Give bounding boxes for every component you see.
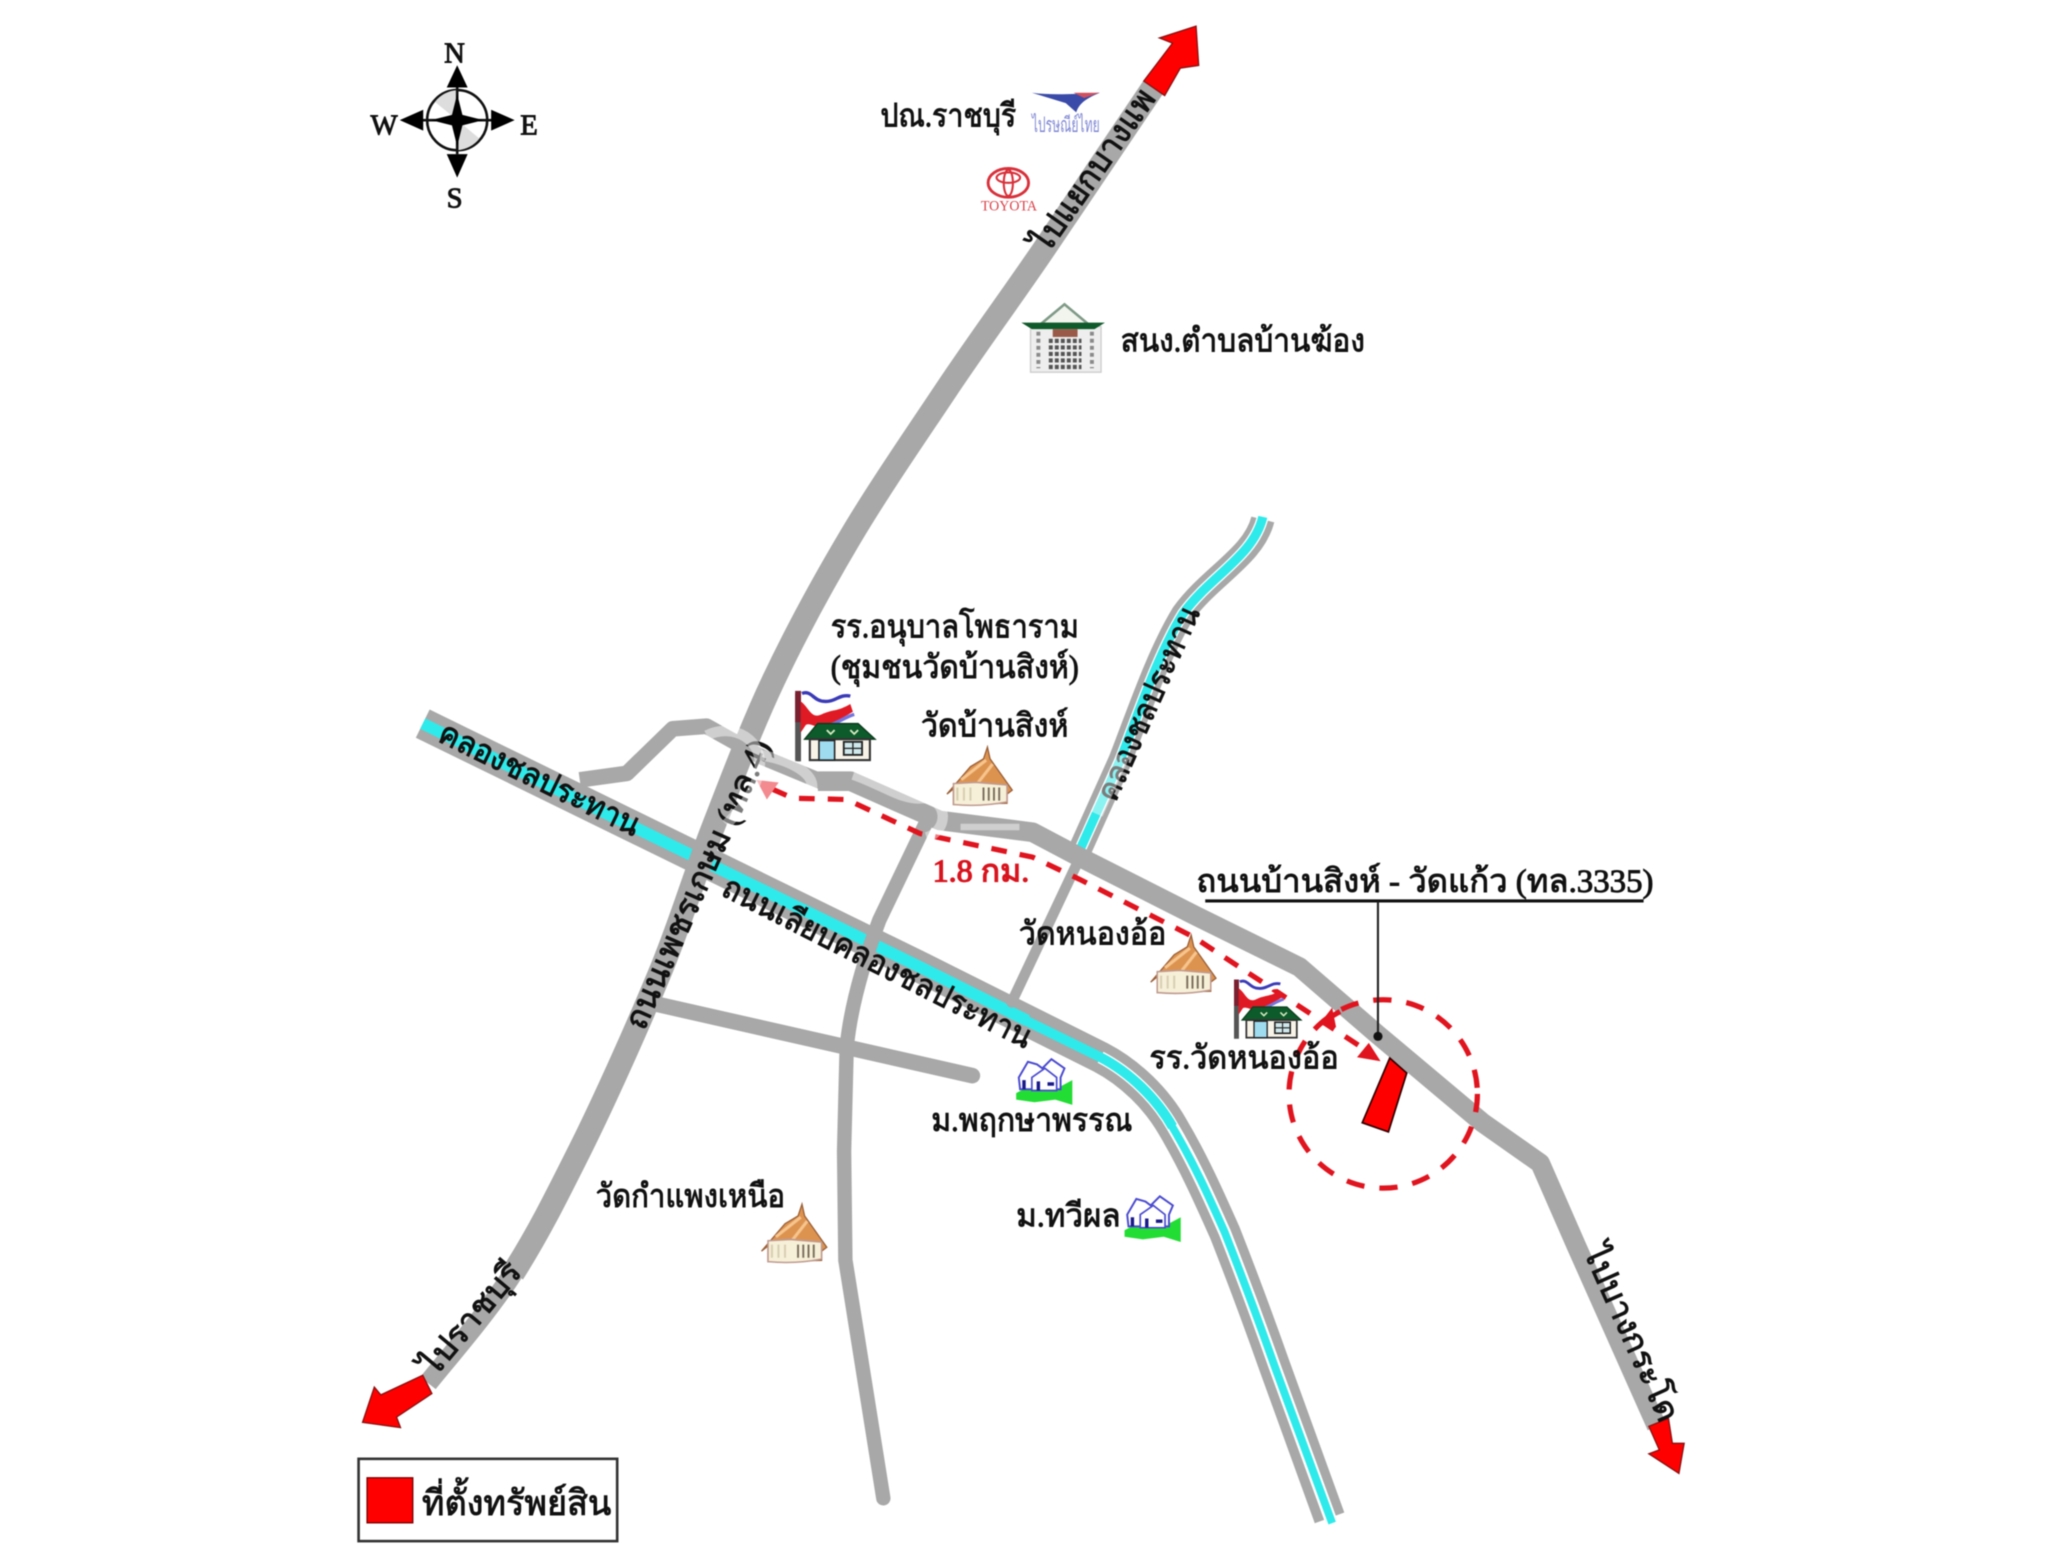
label: kindergarten school: รร.อนุบาลโพธาราม <box>831 607 1079 646</box>
callout leader line <box>1205 901 1644 1041</box>
label: Phruksa Phan housing: ม.พฤกษาพรรณ <box>931 1103 1132 1139</box>
canal: north branch <box>1080 517 1263 851</box>
legend: ที่ตั้งทรัพย์สิน <box>422 1477 611 1523</box>
icon: Wat Ban Sing temple <box>947 747 1012 805</box>
label: kindergarten school: (ชุมชนวัดบ้านสิงห์) <box>831 649 1079 687</box>
road label: Phetkasem: ถนนเพชรเกษม (ทล.4) <box>618 734 779 1035</box>
canal label: north: คลองชลประทาน <box>1090 601 1207 806</box>
icon: Thawi Phon housing <box>1125 1196 1181 1242</box>
icon: post logo: ไปรษณีย์ไทย <box>1031 113 1100 137</box>
icon: Toyota logo: TOYOTA <box>981 198 1038 214</box>
route: 1.8 km dashed line <box>756 780 1381 1061</box>
compass: N <box>444 38 465 70</box>
icon: post logo <box>1031 93 1100 137</box>
label: distance: 1.8 กม. <box>933 854 1029 889</box>
label: Wat Nong O: วัดหนองอ้อ <box>1019 916 1166 952</box>
icon: Wat Nong O temple <box>1151 935 1216 993</box>
icon: subdistrict office <box>1021 304 1105 372</box>
road label: to Bang Kradi: ไปบางกระโด <box>1574 1236 1687 1427</box>
label: Wat Nong O school: รร.วัดหนองอ้อ <box>1149 1040 1339 1076</box>
label: Ratchaburi post office: ปณ.ราชบุรี <box>880 99 1016 136</box>
compass: W <box>370 110 398 142</box>
label: subdistrict office: สนง.ตำบลบ้านฆ้อง <box>1121 323 1365 359</box>
road label: canal-side road: ถนนเลียบคลองชลประทาน <box>716 870 1038 1056</box>
compass: E <box>520 110 538 142</box>
arrow: to Ratchaburi <box>363 1375 432 1428</box>
site marker circle <box>1289 1000 1477 1188</box>
icon: Wat Nong O school <box>1236 980 1301 1039</box>
label: Wat Kamphaeng Nuea: วัดกำแพงเหนือ <box>596 1179 785 1215</box>
label: Wat Ban Sing: วัดบ้านสิงห์ <box>921 708 1068 745</box>
road label: to Ratchaburi: ไปราชบุรี <box>410 1254 530 1386</box>
canal label: west: คลองชลประทาน <box>433 715 646 844</box>
compass: S <box>447 183 463 215</box>
canal: main irrigation canal <box>423 724 1335 1531</box>
label: Ban Sing - Wat Kaew road: ถนนบ้านสิงห์ - วัดแก้ว (ทล.3335) <box>1196 863 1654 900</box>
legend <box>359 1459 617 1541</box>
labels and icons layer <box>359 38 1687 1541</box>
compass <box>370 38 538 215</box>
icon: Toyota logo <box>981 168 1038 214</box>
icon: kindergarten school <box>798 691 875 761</box>
road label: to Bang Phae: ไปแยกบางแพ <box>1021 81 1163 262</box>
road: Ban Sing - Wat Kaew road <box>580 726 1657 1426</box>
road: Phetkasem highway <box>428 88 1153 1383</box>
property location marker <box>1362 1058 1407 1132</box>
icon: Wat Kamphaeng Nuea temple <box>761 1204 827 1262</box>
arrow: to Bang Kradi <box>1649 1418 1684 1473</box>
arrow: to Bang Phae <box>1144 26 1199 96</box>
watermark <box>707 731 1123 837</box>
label: Thawi Phon housing: ม.ทวีผล <box>1016 1198 1121 1234</box>
road: secondary roads <box>654 824 1077 1498</box>
label: kindergarten school <box>831 607 1079 687</box>
icon: Phruksa Phan housing <box>1016 1059 1072 1105</box>
